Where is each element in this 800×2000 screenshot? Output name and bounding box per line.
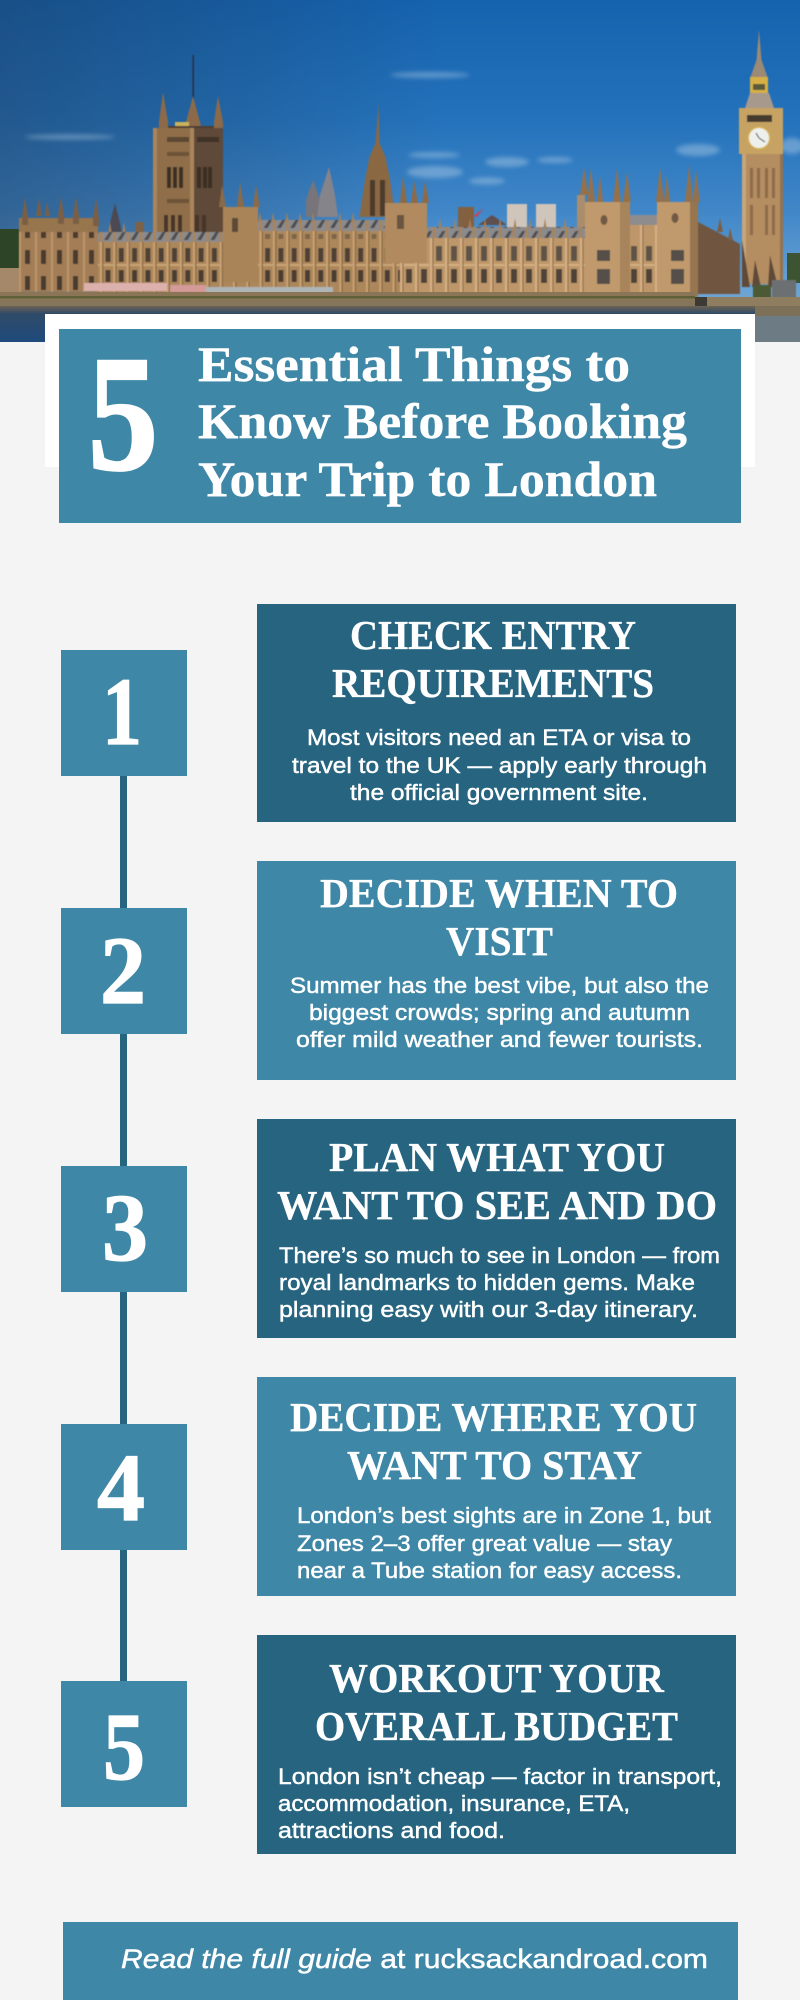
step number 1: [61, 650, 187, 776]
card 5: workout your overall budget: [257, 1635, 736, 1854]
card 2 body: [290, 973, 709, 1052]
card 4 heading: WANT TO STAY: [347, 1442, 642, 1488]
card 3 body: planning easy with our 3-day itinerary.: [279, 1297, 698, 1322]
central spire: [360, 103, 396, 217]
card 2 body: offer mild weather and fewer tourists.: [296, 1027, 703, 1052]
shaded east wing: [698, 222, 740, 294]
title text: Essential Things to: [198, 336, 630, 392]
embankment: [0, 292, 695, 300]
hero photo: Palace of Westminster: [0, 0, 800, 342]
card 1 heading: CHECK ENTRY: [350, 612, 636, 658]
card 1 heading: [332, 612, 654, 706]
step number 2: 2: [100, 917, 146, 1024]
timeline connector: [120, 776, 127, 1681]
card 3: plan what you want to see and do: [257, 1119, 736, 1338]
card 5 body: accommodation, insurance, ETA,: [278, 1791, 630, 1816]
main facade: [98, 212, 657, 297]
card 3 heading: [277, 1134, 717, 1228]
card 4 body: near a Tube station for easy access.: [297, 1558, 682, 1583]
footer call to action: [63, 1922, 738, 2000]
step number 4: [61, 1424, 187, 1550]
card 3 body: [279, 1243, 720, 1322]
title text: Know Before Booking: [198, 393, 687, 449]
card 1 body: the official government site.: [350, 780, 648, 805]
step number 2: [61, 908, 187, 1034]
facade towers: [219, 165, 700, 297]
card 5 body: attractions and food.: [278, 1818, 505, 1843]
card 4 body: [297, 1503, 712, 1583]
card 3 heading: WANT TO SEE AND DO: [277, 1182, 717, 1228]
card 5 heading: OVERALL BUDGET: [315, 1703, 678, 1749]
card 2: decide when to visit: [257, 861, 736, 1080]
title text: Your Trip to London: [198, 451, 657, 507]
riverside marquees: [84, 283, 333, 294]
title text: [198, 336, 687, 507]
card 1 body: travel to the UK — apply early through: [292, 753, 707, 778]
card 5 heading: [315, 1655, 678, 1749]
step number 4: 4: [97, 1434, 145, 1541]
left block: [19, 196, 144, 292]
card 5 body: [278, 1764, 722, 1843]
Elizabeth Tower (Big Ben): [739, 30, 796, 302]
card 2 body: biggest crowds; spring and autumn: [309, 1000, 690, 1025]
step number 5: [61, 1681, 187, 1807]
step number 5: 5: [103, 1693, 145, 1800]
Victoria Tower: [153, 55, 223, 234]
card 1 heading: REQUIREMENTS: [332, 660, 654, 706]
step number 1: 1: [102, 658, 142, 765]
big number 5: 5: [88, 322, 158, 505]
card 4 heading: [290, 1394, 697, 1488]
card 3 body: There’s so much to see in London — from: [279, 1243, 720, 1268]
title backing panel (white): [45, 314, 755, 467]
trees and left wall: [0, 229, 19, 269]
card 2 heading: DECIDE WHEN TO: [320, 870, 678, 916]
card 2 heading: [320, 870, 678, 964]
card 1 body: Most visitors need an ETA or visa to: [307, 725, 691, 750]
step number 3: 3: [102, 1174, 148, 1281]
card 4 body: London’s best sights are in Zone 1, but: [297, 1503, 712, 1528]
card 2 heading: VISIT: [446, 918, 553, 964]
card 5 heading: WORKOUT YOUR: [329, 1655, 664, 1701]
card 4 body: Zones 2–3 offer great value — stay: [297, 1531, 673, 1556]
card 1 body: [292, 725, 707, 805]
footer text: Read the full guide at rucksackandroad.com: [121, 1944, 708, 1974]
title banner: [59, 322, 741, 523]
card 3 body: royal landmarks to hidden gems. Make: [279, 1270, 695, 1295]
card 5 body: London isn’t cheap — factor in transport,: [278, 1764, 722, 1789]
step number 3: [61, 1166, 187, 1292]
grey lanterns: [306, 180, 320, 217]
distant towers: [458, 204, 556, 227]
card 2 body: Summer has the best vibe, but also the: [290, 973, 709, 998]
card 4 heading: DECIDE WHERE YOU: [290, 1394, 697, 1440]
card 1: check entry requirements: [257, 604, 736, 822]
card 4: decide where you want to stay: [257, 1377, 736, 1596]
card 3 heading: PLAN WHAT YOU: [329, 1134, 665, 1180]
